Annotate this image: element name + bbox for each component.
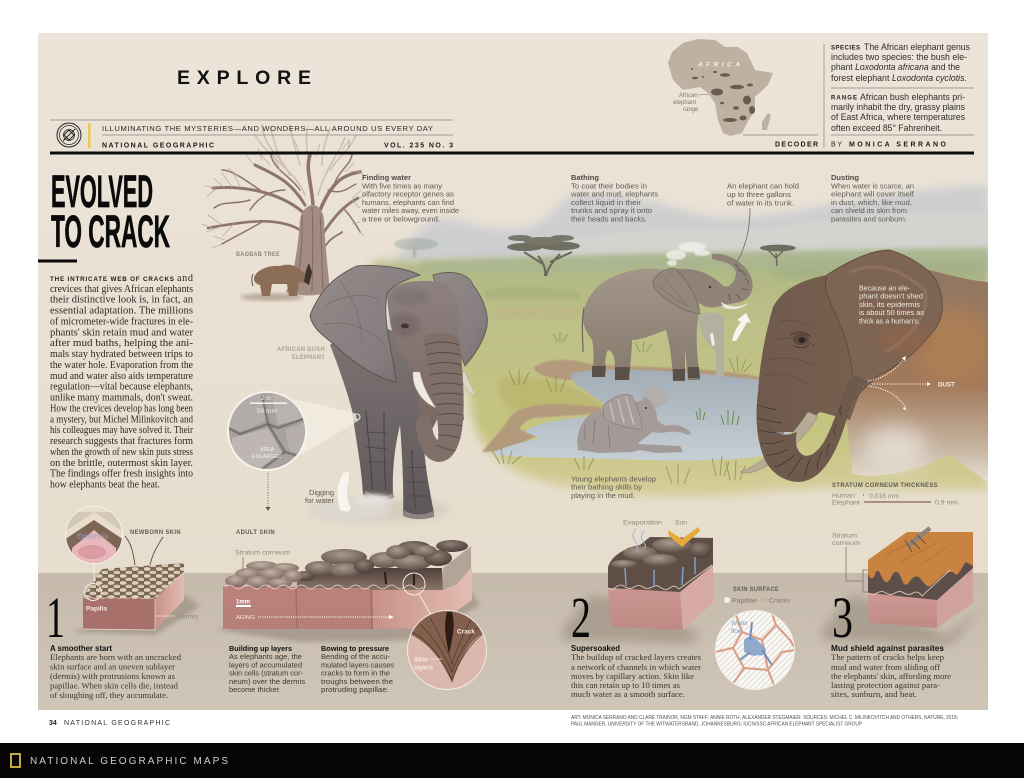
lumps segment three [369, 540, 468, 590]
text: intro paragraph: mals stay hydrated between trips to [50, 349, 193, 360]
text: range [831, 92, 965, 133]
text: decoder byline: DECODER [775, 142, 818, 148]
text: finding water: olfactory receptor genes as [362, 190, 454, 199]
numeral: 3: 3 [832, 585, 853, 650]
text: bathing [570, 173, 658, 223]
arrow: aging: AGING [236, 615, 255, 621]
text: bathing: Bathing [571, 173, 599, 182]
far elephant in water [698, 312, 724, 376]
text: intro paragraph: THE INTRICATE WEB OF CRACKS [50, 276, 174, 283]
trunk [756, 376, 867, 482]
chart: stratum corneum thickness: Human [832, 492, 855, 499]
text: bowing to pressure: cracks to form in the [321, 668, 390, 678]
arrow: digging motion [337, 472, 351, 512]
callout: area enlarged [225, 390, 360, 474]
block: adult skin [215, 540, 480, 642]
text: young elephants: Young elephants develop [571, 474, 656, 484]
text: finding water: Finding water [362, 173, 411, 182]
text: a smoother start: A smoother start [50, 644, 112, 653]
scale: 1mm: 1mm [236, 600, 250, 606]
footer: folio: NATIONAL GEOGRAPHIC [64, 720, 170, 727]
text: finding water: water miles away, even inside [361, 206, 459, 215]
text: decoder byline: MONICA SERRANO [849, 142, 947, 148]
text: mud shield against parasites: sites, sunburn, and heat. [831, 690, 917, 699]
text: elephant range [673, 93, 709, 113]
text: mud shield against parasites [831, 644, 951, 699]
text: building up layers: As elephants age, the [229, 652, 302, 661]
scale bar: 50 mm [257, 408, 277, 415]
text: intro paragraph: when the growth of new skin puts stress [50, 447, 193, 458]
text: mud shield against parasites: The pattern of cracks helps keep [831, 653, 944, 662]
text: newborn skin heading: NEWBORN SKIN [130, 530, 181, 536]
text: intro paragraph: research suggests that fractures form [50, 436, 193, 447]
text: mud shield against parasites: the elephants' skin, affording more [831, 672, 951, 681]
text: supersoaked: this can retain up to 10 times as [571, 681, 680, 690]
text: stratum corneum label: Stratum corneum [235, 550, 290, 556]
text: water flow [731, 620, 749, 635]
text: finding water: humans, elephants can find [362, 198, 454, 207]
text: young elephants: their bathing skills by [571, 482, 642, 492]
panel: savanna landscape [372, 186, 988, 497]
text: bathing: water and mud, elephants [570, 190, 658, 199]
title: evolved to crack: EVOLVED [51, 166, 153, 217]
text: supersoaked: a network of channels in which water [571, 663, 701, 672]
chart: stratum corneum thickness: 0.9 mm [935, 500, 958, 506]
text: water flow: Water [731, 620, 749, 627]
text: intro paragraph: on the brittle, outermost skin layer. [50, 458, 193, 469]
text: building up layers: layers of accumulated [229, 660, 302, 670]
text: a smoother start [50, 644, 182, 700]
text: young elephants: playing in the mud. [571, 491, 635, 500]
mud bank upper [533, 360, 760, 382]
text: bathing: collect liquid in their [571, 198, 642, 207]
text: finding water: With five times as many [362, 181, 442, 190]
text: because an elephant: phant doesn't shed [859, 292, 923, 301]
body and legs [330, 320, 440, 518]
text: three gallons: up to three gallons [727, 190, 791, 199]
text: digging for water [305, 488, 335, 505]
text: building up layers: neum) over the dermis [229, 677, 305, 686]
leader: trunk gallons [737, 208, 750, 262]
text: area enlarged: ENLARGED [252, 454, 282, 460]
text: supersoaked: much water as a smooth surface. [571, 690, 685, 699]
text: epidermis: Epidermis [77, 532, 108, 540]
block: newborn skin [72, 536, 200, 635]
tusk [722, 303, 747, 309]
icon: acacia tree left [507, 235, 580, 276]
masthead: NATIONAL GEOGRAPHIC [102, 142, 214, 150]
title: evolved to crack [51, 166, 170, 257]
text: stratum corneum label 3 [832, 532, 860, 547]
text: evaporation and sun: Evaporation [623, 520, 662, 526]
chart: stratum corneum thickness: Elephant [832, 500, 860, 506]
text: building up layers [229, 644, 305, 694]
legend: skin surface: SKIN SURFACE [733, 587, 779, 593]
text: species: SPECIES [831, 46, 860, 52]
icon: sun rays [668, 527, 700, 547]
text: a smoother start: (dermis) with protrusions known as [50, 672, 175, 681]
text: intro paragraph: regulation—vital because elephants, [50, 382, 193, 393]
text: supersoaked: moves by capillary action. Skin like [571, 672, 694, 681]
block: supersoaked skin [562, 527, 722, 644]
text: supersoaked [571, 644, 701, 699]
text: area enlarged: AREA [260, 447, 275, 453]
callout: epidermis circle [65, 506, 123, 584]
text: dusting: When water is scarce, an [831, 181, 914, 190]
body [583, 269, 700, 380]
text: range: African bush elephants pri- [860, 92, 965, 102]
grass bank near pond [499, 378, 605, 412]
text: dusting: elephant will cover itself [831, 190, 915, 199]
text: range: of East Africa, where temperatures [831, 112, 965, 122]
masthead: ILLUMINATING THE MYSTERIES—AND WONDERS—ALL AROUND US EVERY DAY [102, 124, 433, 133]
text: digging for water: for water [305, 496, 335, 505]
head [758, 275, 859, 432]
text: range: often exceed 85° Fahrenheit. [831, 123, 942, 133]
icon: parasite [905, 528, 930, 552]
numeral: 2: 2 [571, 585, 591, 650]
text: supersoaked: The buildup of cracked layers creates [571, 653, 701, 662]
text: species: phant Loxodonta africana and the [831, 62, 960, 72]
text: three gallons: An elephant can hold [727, 182, 799, 191]
text: mud shield against parasites: Mud shield against parasites [831, 644, 944, 653]
footer: credits: PAUL MANGER, UNIVERSITY OF THE WITWATERSRAND, JOHANNESBURG; IUCN/SSC AFRICAN ELEPHANT SPECIALIST GROUP [571, 722, 862, 728]
text: adult skin heading: ADULT SKIN [236, 530, 275, 536]
chart: stratum corneum thickness: 0.018 mm [869, 493, 899, 500]
eye [791, 332, 811, 348]
text: digging for water: Digging [309, 488, 334, 497]
text: intro paragraph: phants' skin retain mud and water [50, 327, 194, 338]
text: Africa: AFRICA [697, 62, 740, 68]
illustration: bathing elephant [582, 242, 753, 381]
distant tree group [394, 238, 438, 257]
footer: credits: ART: MONICA SERRANO AND CLARE TRAINOR, NGM STAFF; ANNIE ROTH, ALEXANDER STEGMAIER. SOURCES: MICHEL C. MILINKOVITCH AND OTHERS, NATURE, 2018; [571, 715, 958, 721]
illustration: dusting elephant close-up [740, 250, 991, 482]
illustration: baby elephant [577, 386, 691, 453]
text: elephant range: elephant [673, 100, 696, 106]
text: bowing to pressure: troughs between the [321, 677, 393, 686]
text: bowing to pressure: Bowing to pressure [321, 644, 389, 653]
left tusk [413, 372, 436, 408]
text: building up layers: skin cells (stratum cor- [229, 668, 303, 678]
dust arrows [868, 359, 927, 408]
right ear [433, 272, 487, 366]
text: dusting: can shield its skin from [831, 206, 907, 215]
text: African bush elephant label: ELEPHANT [292, 355, 325, 361]
block: mud shield skin [822, 528, 982, 645]
text: three gallons [727, 182, 799, 207]
text: species: The African elephant genus [864, 42, 970, 52]
text: a smoother start: skin surface and an uneven sublayer [50, 662, 175, 672]
text: decoder byline: BY [831, 142, 842, 148]
text: area enlarged [252, 447, 282, 460]
text: dusting: in dust, which, like mud, [831, 198, 912, 207]
text: water flow: flow [731, 628, 743, 635]
text: intro paragraph: after mud baths, helping the ani- [50, 338, 194, 349]
text: species: forest elephant Loxodonta cyclotis. [831, 73, 967, 83]
text: finding water: a tree or belowground. [362, 214, 440, 223]
icon: compass logo [57, 123, 81, 147]
illustration: small elephant at baobab [240, 263, 312, 300]
text: intro paragraph: and [177, 273, 193, 284]
text: African bush elephant label: AFRICAN BUSH [277, 347, 325, 353]
text: bowing to pressure: mulated layers causes [321, 660, 394, 670]
masthead [50, 120, 974, 154]
text: supersoaked: Supersoaked [571, 644, 620, 653]
text: intro paragraph: their distinctive look is, in fact, an [50, 295, 193, 306]
right tusk [460, 372, 476, 396]
text: skin layers [414, 656, 442, 672]
text: dusting: Dusting [831, 173, 859, 182]
grass tufts [492, 332, 752, 484]
footer bar: National Geographic Maps [0, 743, 1024, 778]
text: building up layers: become thicker. [229, 685, 281, 694]
text: intro paragraph: essential adaptation. The millions [50, 306, 193, 317]
rule under title [38, 260, 77, 262]
lumps segment two [295, 549, 374, 588]
legend: skin surface: Cracks [769, 598, 791, 604]
text: dusting [831, 173, 915, 223]
text: evaporation and sun [623, 520, 687, 526]
text: because an elephant [859, 284, 924, 325]
panel: ground band [38, 573, 988, 710]
text: bathing: their heads and backs. [571, 214, 647, 223]
text: papilla label: Papilla [86, 606, 107, 612]
text: species: includes two species: the bush ele- [831, 52, 967, 62]
arrow: dotted to skin [266, 473, 270, 511]
text: intro paragraph: mud and water also aids temperature [50, 371, 193, 382]
scale bar [250, 395, 287, 415]
text: a smoother start: papillae. When skin cells die, instead [50, 682, 179, 690]
text: African bush elephant label [277, 347, 325, 361]
text: dermis label: Dermis [177, 614, 199, 620]
text: species [831, 42, 970, 83]
ear [825, 250, 942, 398]
arrow: aging [236, 615, 394, 621]
icon: acacia tree right [760, 245, 796, 266]
text: stratum corneum label 3: Stratum [832, 532, 857, 540]
head [387, 281, 464, 420]
text: baobab tree label: BAOBAB TREE [236, 252, 280, 258]
arrow: spray up [732, 313, 751, 341]
text: range: RANGE [831, 96, 857, 102]
text: DUST: DUST [938, 382, 955, 388]
text: young elephants [571, 474, 656, 500]
numeral: 1: 1 [46, 585, 65, 650]
text: mud shield against parasites: lasting protection against para- [831, 681, 940, 690]
lumps segment one [225, 561, 302, 588]
illustration: African bush elephant front [310, 265, 487, 521]
callout: crack circle [403, 573, 487, 690]
text: bowing to pressure: protruding papillae. [321, 685, 389, 694]
scale bar: 2 in [261, 395, 272, 402]
pond [494, 369, 790, 461]
third segment side face [443, 546, 471, 590]
icon: yellow rectangle logo [11, 754, 20, 767]
footer: credits [571, 715, 958, 728]
text: building up layers: Building up layers [229, 644, 292, 653]
title: evolved to crack: TO CRACK [51, 206, 170, 257]
text: bowing to pressure: Bending of the accu- [321, 652, 390, 661]
footer: folio: 34 [49, 720, 57, 727]
heading: explore: EXPLORE [177, 67, 311, 89]
legend: skin surface [724, 587, 791, 604]
text: because an elephant: Because an ele- [859, 284, 911, 292]
pink dermis [223, 586, 373, 629]
masthead: VOL. 235 NO. 3 [384, 142, 453, 150]
text: intro paragraph: crevices that gives African elephants [50, 284, 193, 295]
text: a smoother start: of sloughing off, they accumulate. [50, 691, 168, 700]
text: intro paragraph [50, 273, 194, 490]
text: decoder byline [743, 44, 974, 148]
text: crack: Crack [457, 628, 475, 636]
text: skin layers: Skin [414, 656, 428, 664]
text: bathing: To coat their bodies in [571, 181, 647, 190]
chart: stratum corneum thickness: STRATUM CORNEUM THICKNESS [832, 483, 938, 489]
head and trunk [670, 254, 753, 307]
text: because an elephant: thick as a human's. [859, 316, 920, 325]
ear [653, 269, 700, 314]
text: intro paragraph: The findings offer fresh insights into [50, 469, 193, 480]
text: intro paragraph: a mystery, but Michel Milinkovitch and [50, 414, 193, 425]
legend: skin surface: Papillae [732, 598, 757, 604]
text: intro paragraph: How the crevices develop has long been [50, 403, 193, 414]
text: evaporation and sun: Sun [675, 520, 687, 526]
diagram: skin surface circle [715, 608, 796, 690]
text: bathing: trunks and spray it onto [571, 206, 652, 215]
map: African elephant range [668, 39, 773, 136]
text: intro paragraph: the water hole. Evaporation from the [50, 360, 193, 371]
illustration: digging dust [312, 494, 392, 519]
eye [401, 324, 409, 328]
left ear [310, 265, 420, 382]
trunk [416, 333, 464, 462]
mud bank lower [482, 404, 604, 452]
text: because an elephant: skin, its epidermis [859, 300, 920, 309]
text: finding water [361, 173, 459, 223]
text: mud shield against parasites: mud and water from sliding off [831, 663, 940, 672]
text: because an elephant: is about 50 times as [859, 308, 924, 317]
illustration: baobab tree [202, 125, 366, 295]
water spray [666, 242, 710, 266]
text: stratum corneum label 3: corneum [832, 540, 860, 547]
text: skin layers: layers [414, 664, 434, 672]
chart: stratum corneum thickness [832, 483, 958, 506]
text: intro paragraph: of micrometer-wide fractures in ele- [50, 316, 194, 328]
tusk [740, 412, 818, 473]
text: three gallons: of water in its trunk. [727, 198, 794, 207]
text: elephant range: African [679, 93, 698, 99]
callout: papilla marker [84, 584, 102, 600]
text: intro paragraph: how elephants beat the heat. [50, 480, 160, 490]
text: bowing to pressure [321, 644, 394, 694]
text: dusting: parasites and sunburn. [831, 214, 907, 223]
footer bar: National Geographic Maps: NATIONAL GEOGRAPHIC MAPS [30, 756, 228, 767]
text: elephant range: range [683, 107, 699, 113]
text: intro paragraph: his colleagues may have solved it. Their [50, 425, 194, 436]
text: a smoother start: Elephants are born with an uncracked [50, 653, 182, 662]
text: range: marily inhabit the dry, grassy plains [831, 102, 965, 112]
text: intro paragraph: unlike many mammals, don't sweat. [50, 393, 193, 404]
